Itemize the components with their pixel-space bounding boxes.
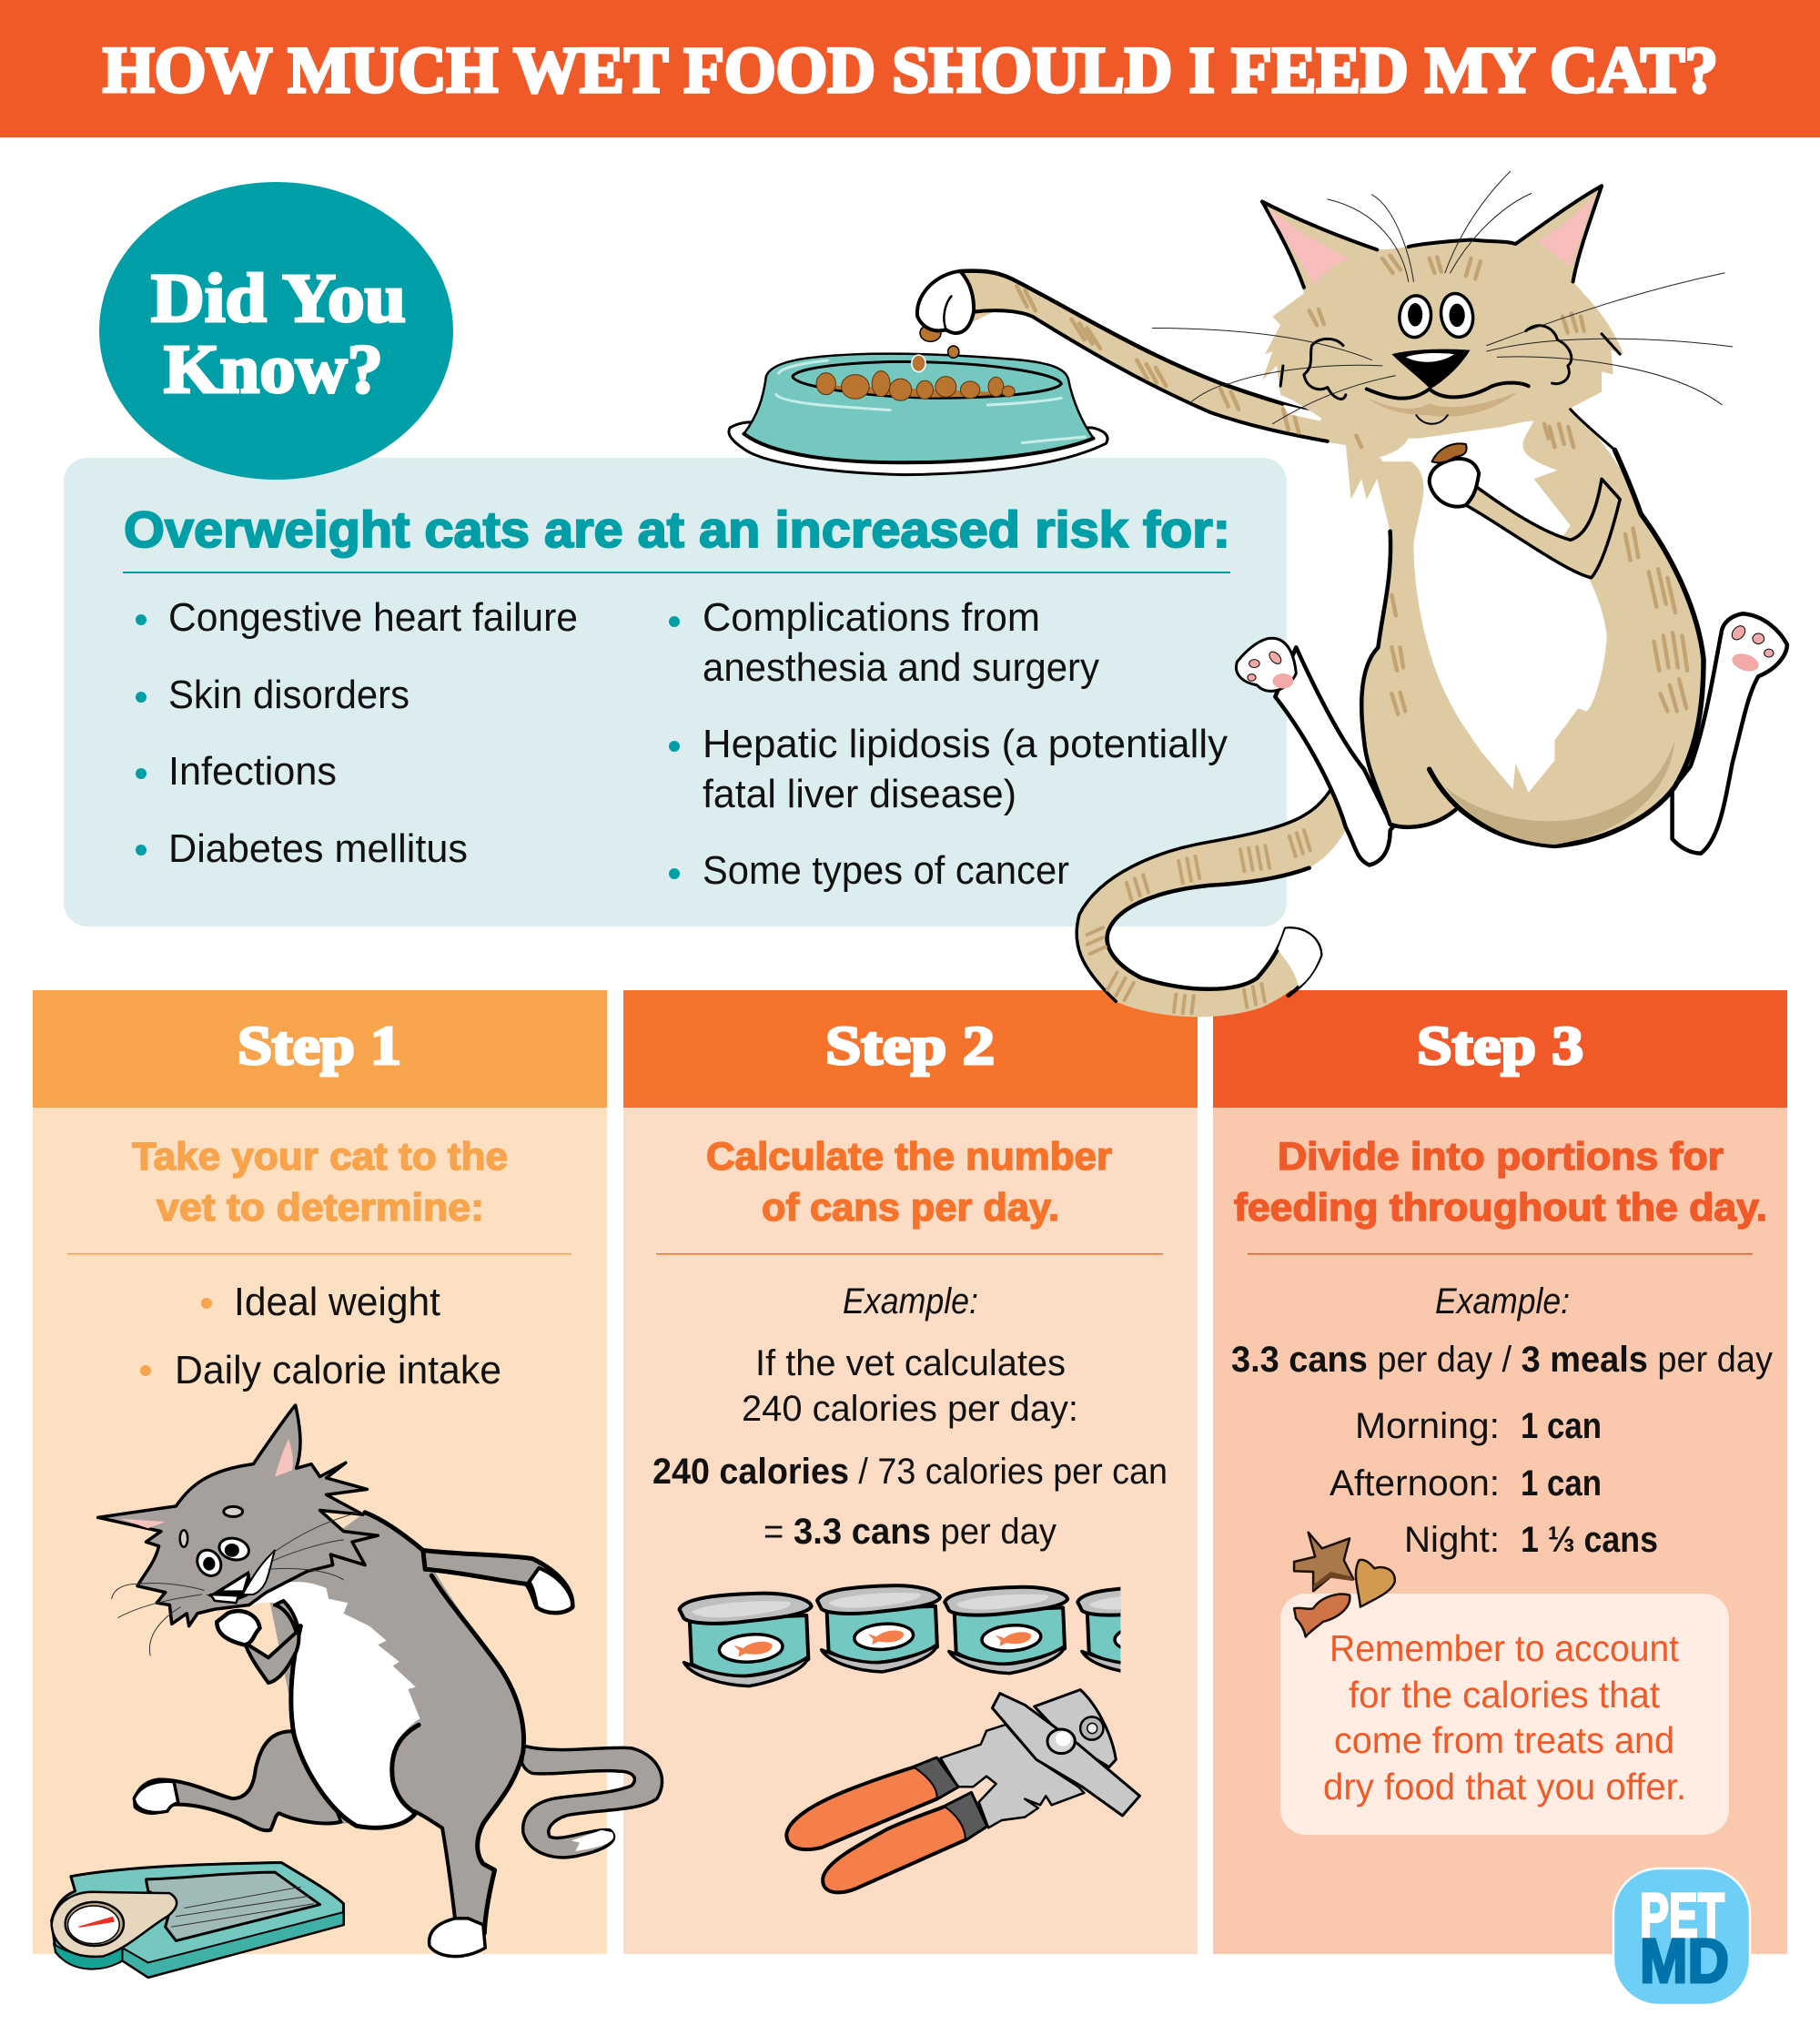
- body: [267, 1513, 524, 1933]
- step 3 example text: 3.3 cans per day / 3 meals per day: [1231, 1340, 1773, 1380]
- step 3 example text: Example:: [1435, 1281, 1570, 1321]
- step 1 subheading: vet to determine:: [157, 1186, 484, 1230]
- step 1 list: [140, 1280, 501, 1392]
- step 3 column: Step 3: [1417, 1016, 1583, 1076]
- head: [1152, 171, 1733, 450]
- step 1 list: Daily calorie intake: [175, 1348, 501, 1392]
- did you know badge: Know?: [164, 331, 383, 408]
- risk list left: Diabetes mellitus: [168, 826, 468, 871]
- risk list left: Skin disorders: [168, 673, 410, 717]
- step 1 column: Step 1: [238, 1016, 401, 1076]
- step 2 column: Step 2: [825, 1016, 995, 1076]
- step 1 subheading: [132, 1135, 508, 1230]
- panel: overweight risks: [64, 458, 1287, 926]
- did you know badge: Did You: [151, 260, 406, 337]
- right hind leg: [1673, 613, 1787, 854]
- illustration: tan cat dropping food: [917, 171, 1787, 1017]
- step 2 subheading: of cans per day.: [762, 1186, 1059, 1230]
- logo: PetMD: PET: [1640, 1880, 1724, 1950]
- logo: PetMD: MD: [1640, 1926, 1729, 1996]
- step 2 example text: 240 calories / 73 calories per can: [652, 1452, 1168, 1492]
- tail: [1077, 786, 1346, 1017]
- risk list right: Some types of cancer: [703, 848, 1069, 893]
- step 2 example text: = 3.3 cans per day: [763, 1512, 1057, 1552]
- can one: [680, 1594, 812, 1686]
- step 1 subheading: Take your cat to the: [132, 1135, 508, 1179]
- step 3 example text: Night:: [1404, 1520, 1500, 1560]
- left hind leg: [1236, 638, 1392, 865]
- callout: treats reminder: dry food that you offer.: [1323, 1766, 1686, 1807]
- icon: treats: [1294, 1533, 1395, 1637]
- can two: [817, 1585, 940, 1672]
- kicked leg: [135, 1731, 341, 1830]
- logo: PetMD: [1613, 1868, 1750, 2005]
- fur stripes: [1309, 256, 1687, 714]
- step 3 example text: Afternoon:: [1330, 1463, 1500, 1504]
- step 1 list: Ideal weight: [234, 1280, 440, 1324]
- step 3 example text: Morning:: [1355, 1406, 1500, 1446]
- step 1 column: [33, 990, 607, 1954]
- small arm: [245, 1601, 298, 1683]
- step 2 example text: [652, 1281, 1168, 1552]
- can four (cropped): [1076, 1587, 1121, 1673]
- body: [1309, 256, 1704, 846]
- step 3 column: [1213, 990, 1787, 1954]
- white belly: [1380, 421, 1607, 793]
- callout: treats reminder: Remember to account: [1330, 1627, 1680, 1669]
- step 2 example text: 240 calories per day:: [742, 1389, 1078, 1429]
- step 2 example text: Example:: [843, 1281, 978, 1321]
- back paw: [430, 1919, 485, 1957]
- risk list right: [669, 595, 1228, 893]
- step 3 example text: 1 can: [1521, 1406, 1602, 1446]
- risk list right: Complications from: [703, 595, 1040, 640]
- step 2 subheading: Calculate the number: [706, 1135, 1112, 1179]
- risk list right: Hepatic lipidosis (a potentially: [703, 722, 1228, 766]
- did you know badge: [99, 182, 453, 480]
- illustration: gray cat on scale: [52, 1405, 662, 1978]
- risk list left: [136, 595, 578, 871]
- panel heading: Overweight cats are at an increased risk for:: [124, 501, 1230, 558]
- reaching arm and paw: [917, 271, 1356, 447]
- step 3 subheading: [1234, 1135, 1767, 1230]
- scale: [52, 1862, 344, 1978]
- can three: [945, 1587, 1067, 1674]
- chest arm: [1430, 443, 1620, 578]
- risk list left: Infections: [168, 749, 337, 794]
- icon: food bowl: [729, 325, 1107, 475]
- right arm: [423, 1550, 572, 1613]
- head: [98, 1405, 378, 1626]
- callout: treats reminder: [1280, 1594, 1729, 1835]
- white belly: [253, 1582, 420, 1828]
- risk list left: Congestive heart failure: [168, 595, 578, 640]
- icon: can opener: [786, 1690, 1139, 1892]
- step 3 example text: [1231, 1281, 1773, 1560]
- step 3 example text: 1 ⅓ cans: [1521, 1520, 1658, 1560]
- callout: treats reminder: for the calories that: [1349, 1674, 1661, 1716]
- risk list right: fatal liver disease): [703, 772, 1016, 816]
- risk list right: anesthesia and surgery: [703, 645, 1099, 690]
- title banner: [0, 0, 1820, 137]
- icon: cans of food: [680, 1585, 1200, 1686]
- step 2 example text: If the vet calculates: [755, 1343, 1066, 1383]
- tail: [521, 1746, 662, 1858]
- step 2 column: [623, 990, 1198, 1954]
- step 3 subheading: Divide into portions for: [1278, 1135, 1724, 1179]
- step 3 example text: 1 can: [1521, 1463, 1602, 1504]
- step 2 subheading: [706, 1135, 1112, 1230]
- step 3 subheading: feeding throughout the day.: [1234, 1186, 1767, 1230]
- title banner: HOW MUCH WET FOOD SHOULD I FEED MY CAT?: [103, 34, 1718, 106]
- callout: treats reminder: come from treats and: [1334, 1719, 1674, 1761]
